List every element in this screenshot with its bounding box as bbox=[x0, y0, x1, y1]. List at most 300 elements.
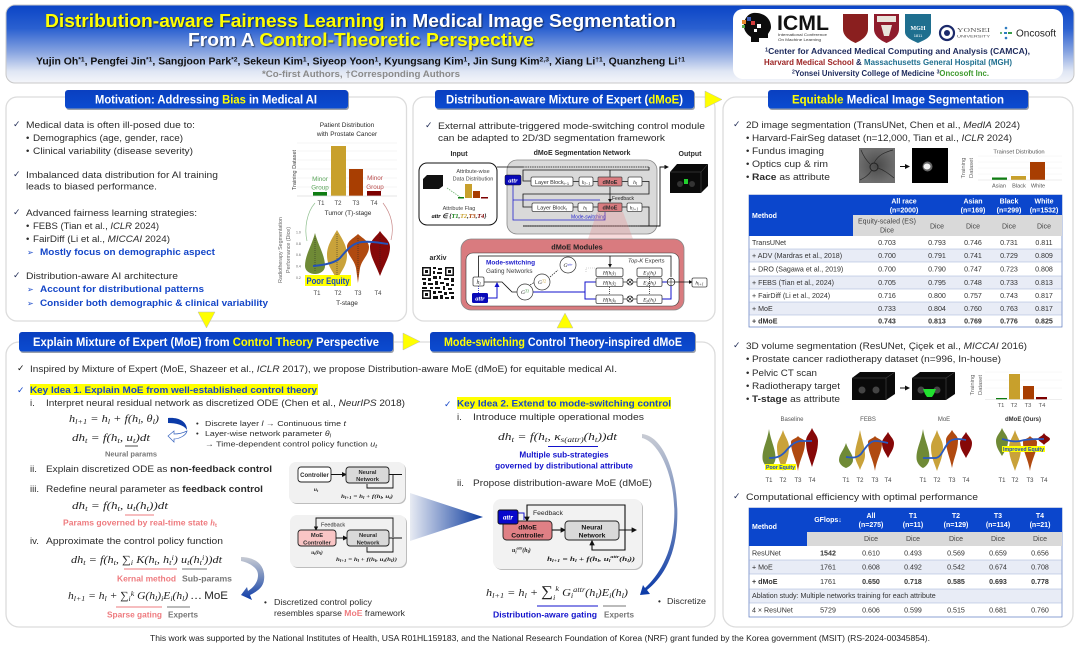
equation: feedback control: Params governed by real-time state h bbox=[63, 518, 215, 528]
table rows: 0.791 bbox=[928, 252, 946, 260]
equation: feedback control bbox=[63, 500, 217, 529]
violin plot: segmentation performance: 1.0 bbox=[296, 230, 301, 234]
diagram: dMoE controller bbox=[493, 499, 643, 570]
text block: motivation bullets: Imbalanced data distribution for AI training bbox=[26, 170, 218, 181]
authors: , Kyungsang Kim bbox=[378, 56, 464, 68]
text block: discrete notes: → Time-dependent control policy function u bbox=[205, 440, 375, 448]
input box: Data Distribution bbox=[453, 176, 493, 182]
equation: distribution-aware gating: i bbox=[609, 591, 611, 600]
arrow: CT to target bbox=[900, 387, 909, 389]
gating nodes: T1 bbox=[525, 290, 529, 294]
table rows: TransUNet bbox=[752, 239, 786, 247]
network box: h bbox=[583, 206, 586, 212]
text block: dMoE description: ✓ bbox=[425, 121, 433, 131]
expert boxes: (h bbox=[648, 270, 653, 276]
expert boxes: l bbox=[653, 282, 654, 286]
text block: motivation bullets: ✓ bbox=[13, 170, 21, 180]
diagram: dMoE segmentation network: Output bbox=[679, 151, 702, 158]
diagram: non-feedback control: , u bbox=[381, 494, 389, 500]
expert boxes: 1 bbox=[646, 272, 648, 276]
bar chart: trainset distribution: Training bbox=[961, 158, 967, 178]
equation: residual network: = h bbox=[87, 413, 108, 425]
network box: Layer Block bbox=[535, 180, 564, 186]
equation: MoE bbox=[68, 589, 228, 620]
equation: MoE: Experts bbox=[168, 610, 198, 620]
violin plot: dMoE: T4 bbox=[1040, 478, 1048, 484]
equation: MoE: h bbox=[68, 590, 74, 602]
input box bbox=[419, 163, 497, 225]
equation: mode switching bbox=[495, 431, 633, 470]
equation: feedback control: t bbox=[133, 504, 137, 513]
table rows: 0.515 bbox=[947, 606, 965, 614]
table rows: 0.795 bbox=[928, 279, 946, 287]
violin plot: segmentation performance: 0.6 bbox=[296, 253, 301, 257]
icon: Harvard shield bbox=[874, 14, 899, 43]
heading: equitable: Equitable Medical Image Segmentation bbox=[792, 94, 1004, 106]
h_l box: l bbox=[479, 281, 481, 286]
text block: introduction: ✓ bbox=[17, 364, 25, 374]
diagram: dMoE controller: Neural bbox=[581, 524, 603, 532]
key idea 1 bbox=[17, 384, 405, 620]
table rows: 1761 bbox=[820, 564, 836, 572]
text block: discrete notes: • bbox=[196, 419, 199, 428]
equation: mode switching: , κ bbox=[547, 431, 562, 443]
diagram: non-feedback control: Neural bbox=[358, 470, 377, 476]
expert boxes: ) bbox=[653, 296, 656, 304]
bar chart: 3D training dataset bbox=[970, 372, 1062, 409]
icon: Yonsei logo: YONSEI bbox=[957, 28, 990, 34]
table rows: 0.729 bbox=[1000, 252, 1018, 260]
diagram: MoE feedback control: l bbox=[358, 559, 360, 563]
heading: dMoE bbox=[435, 90, 695, 110]
table rows: 0.569 bbox=[947, 550, 965, 558]
diagram: non-feedback control: u bbox=[314, 487, 317, 493]
equation: distribution-aware gating: l+1 bbox=[492, 591, 504, 600]
text block: discretized policy note: Discretized control policy bbox=[274, 598, 373, 607]
network box: h bbox=[630, 206, 632, 212]
diagram: MoE feedback control: MoE bbox=[311, 533, 323, 539]
expert boxes: H(h bbox=[603, 280, 611, 286]
equation: kernel method: = f(h bbox=[86, 554, 114, 566]
table: 2D results: Method bbox=[752, 213, 777, 220]
bar chart: 3D training dataset: T1 bbox=[998, 403, 1004, 409]
table: 2D results: Dice bbox=[930, 224, 944, 230]
diagram: non-feedback control: h bbox=[341, 494, 344, 500]
equation: kernel method: t bbox=[187, 558, 190, 567]
arrow: motivation to control theory bbox=[198, 312, 215, 328]
affiliation text bbox=[764, 46, 1030, 78]
equation: kernel method: t bbox=[114, 558, 117, 567]
diagram: dMoE segmentation network bbox=[419, 150, 708, 234]
table rows: 0.700 bbox=[878, 266, 896, 274]
text block: 2D segmentation: • bbox=[746, 172, 749, 183]
arrow: minor group T1 to violin bbox=[306, 203, 315, 241]
violin plot: Baseline: T3 bbox=[794, 478, 802, 484]
text block: 2D segmentation: Harvard-FairSeg dataset (n=12,000, Tian et al., ICLR 2024) bbox=[752, 133, 1012, 144]
table rows: 0.659 bbox=[989, 550, 1007, 558]
diagram: non-feedback control: l bbox=[363, 496, 366, 500]
authors: *2 bbox=[231, 56, 238, 64]
table rows: + FairDiff (Li et al., 2024) bbox=[752, 292, 830, 300]
text block: 2D segmentation: • bbox=[746, 146, 749, 157]
network box: l bbox=[586, 207, 588, 212]
table: 3D efficiency: (n=114) bbox=[986, 522, 1010, 529]
table: 3D efficiency: Dice bbox=[1033, 536, 1047, 543]
table: 2D results: (n=169) bbox=[961, 208, 985, 214]
gating nodes bbox=[517, 257, 576, 300]
CT volume bbox=[852, 372, 895, 400]
table rows: 0.813 bbox=[1035, 279, 1053, 287]
violin plot: FEBS: T3 bbox=[871, 478, 879, 484]
title: Distribution-aware Fairness Learning in Medical Image Segmentation bbox=[45, 10, 676, 31]
text block: motivation bullets bbox=[13, 120, 269, 309]
diagram: MoE feedback control: + f(h bbox=[359, 556, 375, 563]
network box: l bbox=[566, 207, 567, 212]
diagram: MoE feedback control: Neural bbox=[359, 533, 377, 539]
equation: MoE: k bbox=[131, 589, 135, 598]
icon: Oncosoft logo: Oncosoft bbox=[1016, 28, 1056, 40]
diagram: non-feedback control: Network bbox=[356, 477, 380, 483]
text block: discrete notes: • bbox=[196, 429, 199, 438]
equation: kernel method: Sub-params bbox=[182, 574, 232, 584]
heading: mode-switching: Mode-switching Control Theory-inspired dMoE bbox=[444, 337, 682, 349]
diagram: MoE feedback control: u bbox=[311, 550, 314, 556]
equation: feedback control: t bbox=[147, 504, 150, 513]
attr box bbox=[472, 293, 488, 303]
table rows: 0.731 bbox=[1000, 239, 1018, 247]
affiliation text: 1 bbox=[765, 48, 768, 54]
expert boxes: (h bbox=[648, 296, 653, 304]
table rows: 0.811 bbox=[1035, 239, 1053, 247]
table: 2D results: Dice bbox=[966, 224, 980, 230]
equation: MoE: + ∑ bbox=[107, 590, 129, 602]
equation: distribution-aware gating: G bbox=[559, 587, 571, 599]
table rows: 0.769 bbox=[964, 318, 982, 326]
authors: †1 bbox=[595, 56, 603, 64]
table rows: 0.703 bbox=[878, 239, 896, 247]
table: 3D efficiency: T2 bbox=[952, 513, 960, 520]
table rows: 1761 bbox=[820, 578, 836, 586]
text block: 2D segmentation: ✓ bbox=[733, 120, 741, 130]
equation: kernel method: ))dt bbox=[203, 554, 223, 566]
table rows: 0.650 bbox=[862, 578, 880, 586]
text block: 3D segmentation: • bbox=[746, 368, 749, 379]
equation: MoE: l+1 bbox=[74, 594, 85, 603]
equation: MoE: = h bbox=[85, 590, 105, 602]
equation: ODE: t bbox=[85, 436, 89, 445]
diagram: non-feedback control: = h bbox=[352, 494, 363, 500]
equation: residual network: l bbox=[138, 417, 140, 426]
table: 3D efficiency: (n=21) bbox=[1030, 522, 1050, 529]
violin plot: segmentation performance: 0.8 bbox=[296, 242, 301, 246]
bar chart: 3D training dataset: T4 bbox=[1039, 403, 1046, 409]
table rows: 0.723 bbox=[1000, 266, 1018, 274]
diagram: MoE feedback control: (h bbox=[315, 549, 320, 556]
expert boxes: H(h bbox=[603, 270, 611, 276]
equation: MoE: E bbox=[162, 590, 171, 602]
equation: kernel method: Kernal method bbox=[117, 574, 176, 584]
table rows: 5729 bbox=[820, 606, 836, 614]
table rows: 0.681 bbox=[989, 606, 1007, 614]
table rows: 0.808 bbox=[1035, 266, 1053, 274]
text block: 3D segmentation: 3D volume segmentation (ResUNet, Çiçek et al., MICCAI 2016) bbox=[746, 341, 1027, 352]
violin plot: MoE: T4 bbox=[962, 478, 970, 484]
attr box: attr bbox=[508, 178, 518, 184]
key idea 2: i. bbox=[457, 412, 462, 423]
table rows: 0.693 bbox=[989, 578, 1007, 586]
authors: , Sangjoon Park bbox=[152, 56, 232, 68]
table rows: 0.800 bbox=[928, 292, 946, 300]
table rows: 0.599 bbox=[904, 606, 922, 614]
equation: distribution-aware gating: i bbox=[571, 591, 573, 600]
text block: motivation bullets: Medical data is often ill-posed due to: bbox=[26, 120, 195, 131]
zoom beam: dMoE to modules bbox=[588, 212, 633, 239]
arrow: fundus to mask bbox=[900, 166, 909, 168]
diagram: MoE feedback control: , u bbox=[375, 557, 384, 563]
violin plot: MoE: T2 bbox=[933, 478, 941, 484]
authors: , Siyeop Yoon bbox=[307, 56, 375, 68]
h_l box: h bbox=[476, 280, 479, 286]
text block: motivation bullets: FEBS (Tian et al., ICLR 2024) bbox=[33, 221, 159, 232]
diagram: non-feedback control: + f(h bbox=[364, 493, 381, 500]
table rows: 0.804 bbox=[928, 305, 946, 313]
network box: dMoE bbox=[603, 206, 618, 212]
table: 3D efficiency: GFlops↓ bbox=[814, 517, 842, 524]
network box: l−1 bbox=[584, 181, 590, 186]
diagram: dMoE controller: Network bbox=[579, 532, 606, 540]
text block: 2D segmentation bbox=[733, 120, 1020, 183]
table rows: 0.718 bbox=[904, 578, 922, 586]
bar chart: patient distribution: T3 bbox=[352, 201, 360, 207]
violin plot: dMoE: Improved Equity bbox=[1003, 447, 1045, 453]
violin plot: segmentation performance: T4 bbox=[374, 291, 382, 297]
bar chart: 3D training dataset: Training bbox=[970, 375, 976, 395]
table: 3D efficiency: (n=275) bbox=[859, 522, 883, 529]
violin plot: FEBS: T1 bbox=[842, 478, 850, 484]
text block: motivation bullets: • bbox=[26, 221, 29, 232]
heading: control theory bbox=[19, 332, 394, 353]
equation: kernel method: t bbox=[155, 558, 158, 567]
table rows: 0.746 bbox=[964, 239, 982, 247]
text block: dMoE description: External attribute-triggered mode-switching control module bbox=[438, 121, 705, 132]
expert boxes: 2 bbox=[646, 282, 648, 286]
table: 3D efficiency: (n=129) bbox=[944, 522, 968, 529]
table rows: 0.809 bbox=[1035, 252, 1053, 260]
bar chart: trainset distribution: Dataset bbox=[969, 158, 975, 178]
authors: *1 bbox=[78, 56, 85, 64]
heading: motivation bbox=[65, 90, 349, 110]
diagram: dMoE controller: + f(h bbox=[577, 556, 598, 563]
equation: mode switching: s(attr) bbox=[561, 435, 584, 444]
text block: 2D segmentation: Fundus imaging bbox=[752, 146, 824, 157]
diagram: MoE feedback control: t bbox=[384, 559, 386, 563]
affiliation text: Harvard Medical School & Massachusetts General Hospital (MGH) bbox=[764, 57, 1012, 67]
icon: Oncosoft logo bbox=[1000, 27, 1056, 40]
table: 2D results: Dice bbox=[1002, 224, 1016, 230]
bar chart: trainset distribution: Black bbox=[1012, 184, 1026, 190]
table: 3D efficiency: Dice bbox=[906, 536, 920, 543]
equation: ODE: t bbox=[133, 436, 137, 445]
violin plot: segmentation performance: Radiotherapy Segmentation bbox=[278, 217, 284, 283]
text block: 2D segmentation: • bbox=[746, 159, 749, 170]
table: 2D results: (n=299) bbox=[997, 208, 1021, 214]
diagram: MoE feedback control: l+1 bbox=[340, 559, 347, 563]
bar chart: patient distribution: T4 bbox=[370, 201, 378, 207]
text block: motivation bullets: ✓ bbox=[13, 271, 21, 281]
network box: Layer Block bbox=[537, 206, 566, 212]
equation: mode switching: = f(h bbox=[514, 431, 546, 443]
diagram: dMoE controller: l bbox=[575, 558, 578, 563]
authors: †1 bbox=[677, 56, 685, 64]
icon: ICML logo: International Conference bbox=[778, 32, 828, 37]
key idea 2: ii. bbox=[457, 478, 464, 489]
authors: 1 bbox=[303, 56, 307, 64]
module labels: Mode-switching bbox=[486, 260, 535, 266]
diagram: MoE feedback control: h bbox=[336, 557, 339, 563]
bar chart: trainset distribution: Trainset Distribution bbox=[993, 150, 1045, 156]
violin plot: Baseline: T2 bbox=[779, 478, 787, 484]
violin plot: Baseline bbox=[762, 417, 818, 484]
diagram: dMoE controller: l bbox=[597, 558, 600, 563]
network box: l bbox=[636, 181, 638, 186]
input box: Attribute Flag bbox=[443, 206, 475, 212]
bar chart: patient distribution: Minor bbox=[367, 175, 383, 182]
table: 3D efficiency bbox=[749, 508, 1062, 617]
network box: h bbox=[633, 180, 636, 186]
expert boxes: (h bbox=[648, 280, 653, 286]
diagram: MoE feedback control: t bbox=[314, 552, 316, 556]
equation: residual network: l+1 bbox=[75, 417, 87, 426]
expert boxes: H(h bbox=[603, 298, 611, 304]
bar chart: 3D training dataset: T3 bbox=[1025, 403, 1031, 409]
network box: l−1 bbox=[564, 181, 570, 186]
violin plot: FEBS bbox=[839, 417, 894, 484]
violin plot: MoE: MoE bbox=[938, 417, 950, 423]
table: 2D results: Black bbox=[1000, 198, 1018, 206]
equation: feedback control: ))dt bbox=[148, 500, 169, 512]
key idea 2 bbox=[444, 397, 671, 489]
authors: , Jin Sung Kim bbox=[467, 56, 540, 68]
violin plot: segmentation performance: Poor Equity bbox=[306, 276, 350, 286]
expert boxes: l bbox=[653, 300, 654, 304]
bar chart: trainset distribution: Asian bbox=[992, 184, 1006, 190]
attr box: attr bbox=[503, 514, 513, 522]
equation: ODE: = f(h bbox=[88, 432, 118, 444]
violin plot: FEBS: T4 bbox=[884, 478, 892, 484]
expert boxes bbox=[596, 268, 675, 304]
footer acknowledgement: This work was supported by the National Institutes of Health, USA R01HL159183, and the National Research Foundation of Korea (NRF) grant funded by the Korea government (MSIT) (RS-2024-00345854). bbox=[150, 633, 930, 643]
key idea 2: Introduce multiple operational modes bbox=[473, 412, 644, 423]
panel: equitable segmentation bbox=[723, 90, 1073, 627]
diagram: MoE feedback control: )) bbox=[391, 556, 397, 563]
expert boxes: ) bbox=[653, 280, 656, 286]
table rows: + MoE bbox=[752, 305, 773, 313]
equation: mode switching: (h bbox=[584, 431, 596, 443]
equation: ODE: Neural params bbox=[105, 450, 157, 458]
text block: motivation bullets: • bbox=[26, 146, 29, 157]
bar chart: patient distribution bbox=[292, 122, 397, 217]
text block: efficiency: ✓ bbox=[733, 492, 741, 502]
equation: ODE: )dt bbox=[134, 432, 151, 444]
equation: feedback control: (h bbox=[136, 500, 147, 512]
expert boxes: E bbox=[643, 280, 646, 286]
icon: ICML logo: ICML bbox=[777, 12, 829, 35]
expert boxes: ) bbox=[611, 280, 614, 286]
bar chart: patient distribution: Group bbox=[311, 184, 329, 192]
arrow: dMoE to equitable bbox=[705, 91, 722, 108]
key idea 2: ✓ bbox=[444, 400, 452, 410]
attr box bbox=[498, 510, 518, 524]
table rows: 0.817 bbox=[1035, 292, 1053, 300]
key idea 2: Propose distribution-aware MoE (dMoE) bbox=[473, 478, 652, 489]
diagram: dMoE modules: Top-K Experts bbox=[628, 258, 665, 264]
expert boxes: l bbox=[611, 300, 612, 304]
table: 3D efficiency: All bbox=[867, 513, 876, 520]
text block: 3D segmentation: Radiotherapy target bbox=[752, 381, 840, 392]
key idea 2: Key Idea 2. Extend to mode-switching control bbox=[457, 398, 671, 410]
table: 2D results: White bbox=[1034, 198, 1054, 206]
expert boxes: ) bbox=[653, 270, 656, 276]
diagram: dMoE controller: attr bbox=[516, 546, 523, 550]
text block: motivation bullets: Advanced fairness learning strategies: bbox=[26, 208, 197, 219]
equation: kernel method: i bbox=[171, 553, 174, 562]
equation: distribution-aware gating: attr bbox=[573, 585, 585, 594]
affiliation text: Oncosoft Inc. bbox=[939, 68, 989, 78]
heading: motivation: Motivation: Addressing Bias in Medical AI bbox=[95, 94, 317, 106]
expert boxes: 2 bbox=[614, 282, 616, 286]
equation: MoE: ) bbox=[156, 590, 161, 602]
text block: discretized policy note bbox=[264, 598, 406, 618]
equation: distribution-aware gating: (h bbox=[611, 587, 622, 599]
table: 3D efficiency: T3 bbox=[994, 513, 1002, 520]
table rows: 0.492 bbox=[904, 564, 922, 572]
network box: h bbox=[582, 180, 584, 186]
text block: 2D segmentation: Optics cup & rim bbox=[752, 159, 828, 170]
equation: kernel method: ) u bbox=[173, 554, 188, 566]
table rows: 0.743 bbox=[878, 318, 896, 326]
icon: Yonsei logo: UNIVERSITY bbox=[957, 34, 991, 38]
table rows: 0.700 bbox=[878, 252, 896, 260]
expert boxes: 1 bbox=[614, 272, 616, 276]
table rows: 0.748 bbox=[964, 279, 982, 287]
panel: motivation bbox=[6, 90, 406, 321]
network box: Mode-switching bbox=[571, 214, 606, 220]
equation: distribution-aware gating: k bbox=[555, 584, 560, 593]
diagram: MoE feedback control: (h bbox=[385, 556, 391, 563]
key idea 1: iv. bbox=[30, 536, 39, 547]
equation: kernel method: i bbox=[131, 558, 133, 567]
title: From A Control-Theoretic Perspective bbox=[188, 29, 534, 50]
equation: distribution-aware gating: + bbox=[527, 587, 541, 599]
table rows: 0.743 bbox=[1000, 292, 1018, 300]
authors: 2,3 bbox=[540, 56, 549, 64]
text block: discretize note: Discretize bbox=[667, 597, 706, 606]
equation: MoE: MoE bbox=[204, 590, 228, 602]
text block: motivation bullets: FairDiff (Li et al., MICCAI 2024) bbox=[33, 234, 170, 245]
violin plot: MoE: T3 bbox=[948, 478, 956, 484]
output h_l+1 box: h bbox=[695, 280, 698, 286]
text block: motivation bullets: • bbox=[26, 234, 29, 245]
text block: 3D segmentation bbox=[733, 341, 1027, 405]
table rows: + MoE bbox=[752, 564, 773, 572]
table: 3D efficiency: Dice bbox=[949, 536, 963, 543]
diagram: dMoE controller: l bbox=[515, 550, 517, 554]
diagram: dMoE controller: attr bbox=[610, 554, 620, 559]
table rows: 0.741 bbox=[964, 252, 982, 260]
violin plot: dMoE: T1 bbox=[998, 478, 1006, 484]
text block: discrete notes: Layer-wise network parameter θ bbox=[205, 429, 329, 438]
connector: input to network bbox=[497, 166, 507, 168]
